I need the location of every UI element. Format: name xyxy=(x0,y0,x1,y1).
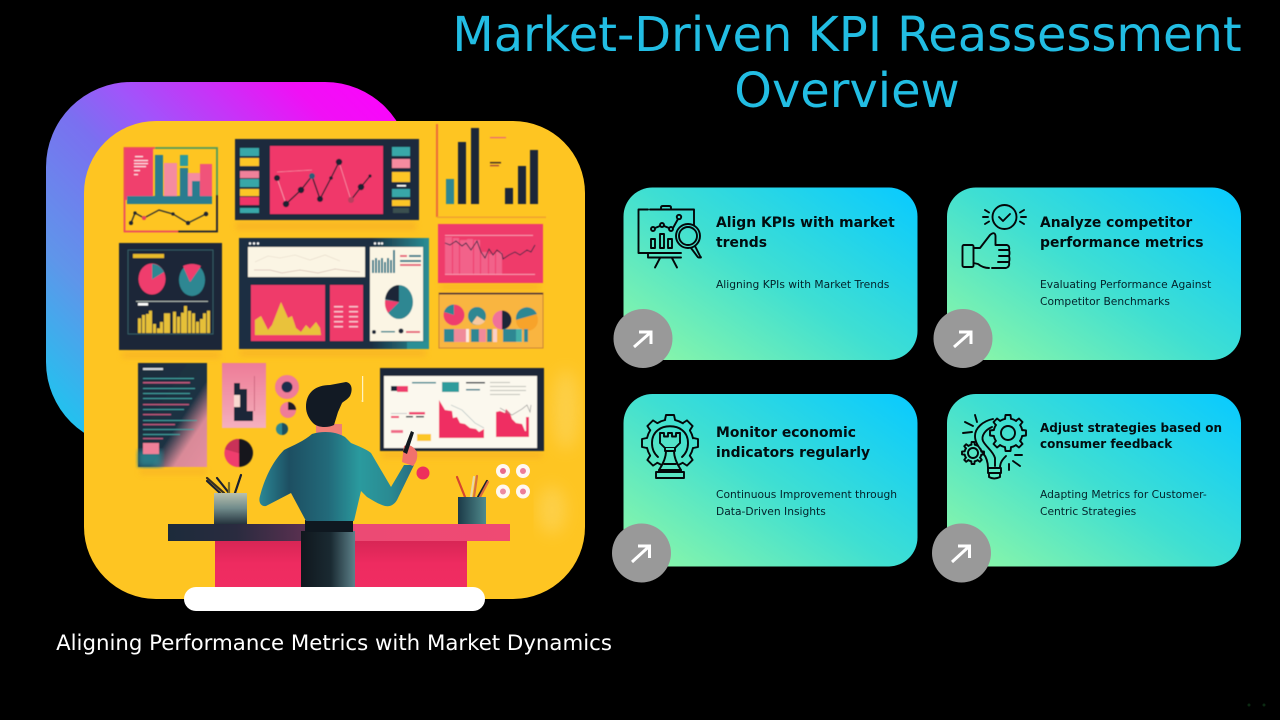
card heading: Analyze competitor xyxy=(1040,215,1192,231)
dark panel: pies and yellow bars xyxy=(119,243,222,350)
card heading: indicators regularly xyxy=(716,445,870,461)
card heading: Align KPIs with market xyxy=(716,215,895,231)
icon: presentation board with magnifier xyxy=(638,206,701,268)
caption: Aligning Performance Metrics with Market Dynamics xyxy=(56,631,612,656)
card description: Continuous Improvement through xyxy=(716,488,897,501)
floating dots xyxy=(362,376,530,498)
chart panel: bars and line xyxy=(124,148,217,232)
faint corner marks xyxy=(1248,704,1266,706)
card description: Adapting Metrics for Customer- xyxy=(1040,488,1207,501)
document panel xyxy=(138,363,207,467)
title: Overview xyxy=(734,64,960,119)
illustration: analyst at dashboard wall xyxy=(84,121,585,599)
card description: Evaluating Performance Against xyxy=(1040,278,1211,291)
gradient backing shape xyxy=(46,82,410,447)
title: Market-Driven KPI Reassessment xyxy=(452,8,1242,63)
desk xyxy=(168,524,510,587)
card description: Aligning KPIs with Market Trends xyxy=(716,278,890,291)
card heading: consumer feedback xyxy=(1040,437,1173,451)
small decorative pie icons xyxy=(224,375,299,467)
card description: Centric Strategies xyxy=(1040,505,1137,518)
icon: thumbs up with check xyxy=(962,205,1026,268)
arrow button xyxy=(614,309,672,368)
pencil cup left xyxy=(207,475,247,524)
arrow button xyxy=(934,309,992,368)
card heading: Monitor economic xyxy=(716,425,856,441)
wall monitor with charts xyxy=(380,368,544,451)
dashboard panel: line chart with side swatches xyxy=(235,139,419,220)
card: analyze competitor xyxy=(934,188,1241,368)
card heading: performance metrics xyxy=(1040,235,1204,251)
card heading: trends xyxy=(716,235,767,251)
card heading: Adjust strategies based on xyxy=(1040,421,1222,435)
card: monitor indicators xyxy=(612,394,918,582)
chart panel: pink stock line xyxy=(438,224,543,283)
card: adjust strategies xyxy=(932,394,1241,582)
chart panel: four pies xyxy=(439,293,543,348)
chart panel: tall dark bars xyxy=(436,124,546,218)
pencil cup right xyxy=(457,476,488,524)
icon: gear with chess rook xyxy=(642,415,698,478)
card description: Competitor Benchmarks xyxy=(1040,295,1170,308)
person seen from behind xyxy=(259,382,417,587)
dashboard panel: central analytics xyxy=(239,238,429,349)
pink poster with blocks xyxy=(222,363,266,428)
arrow button xyxy=(932,524,991,582)
icon: light bulb with gears xyxy=(962,415,1026,478)
card: align KPIs xyxy=(614,188,918,368)
card description: Data-Driven Insights xyxy=(716,505,826,518)
arrow button xyxy=(612,524,671,582)
white caption pill xyxy=(184,587,485,611)
